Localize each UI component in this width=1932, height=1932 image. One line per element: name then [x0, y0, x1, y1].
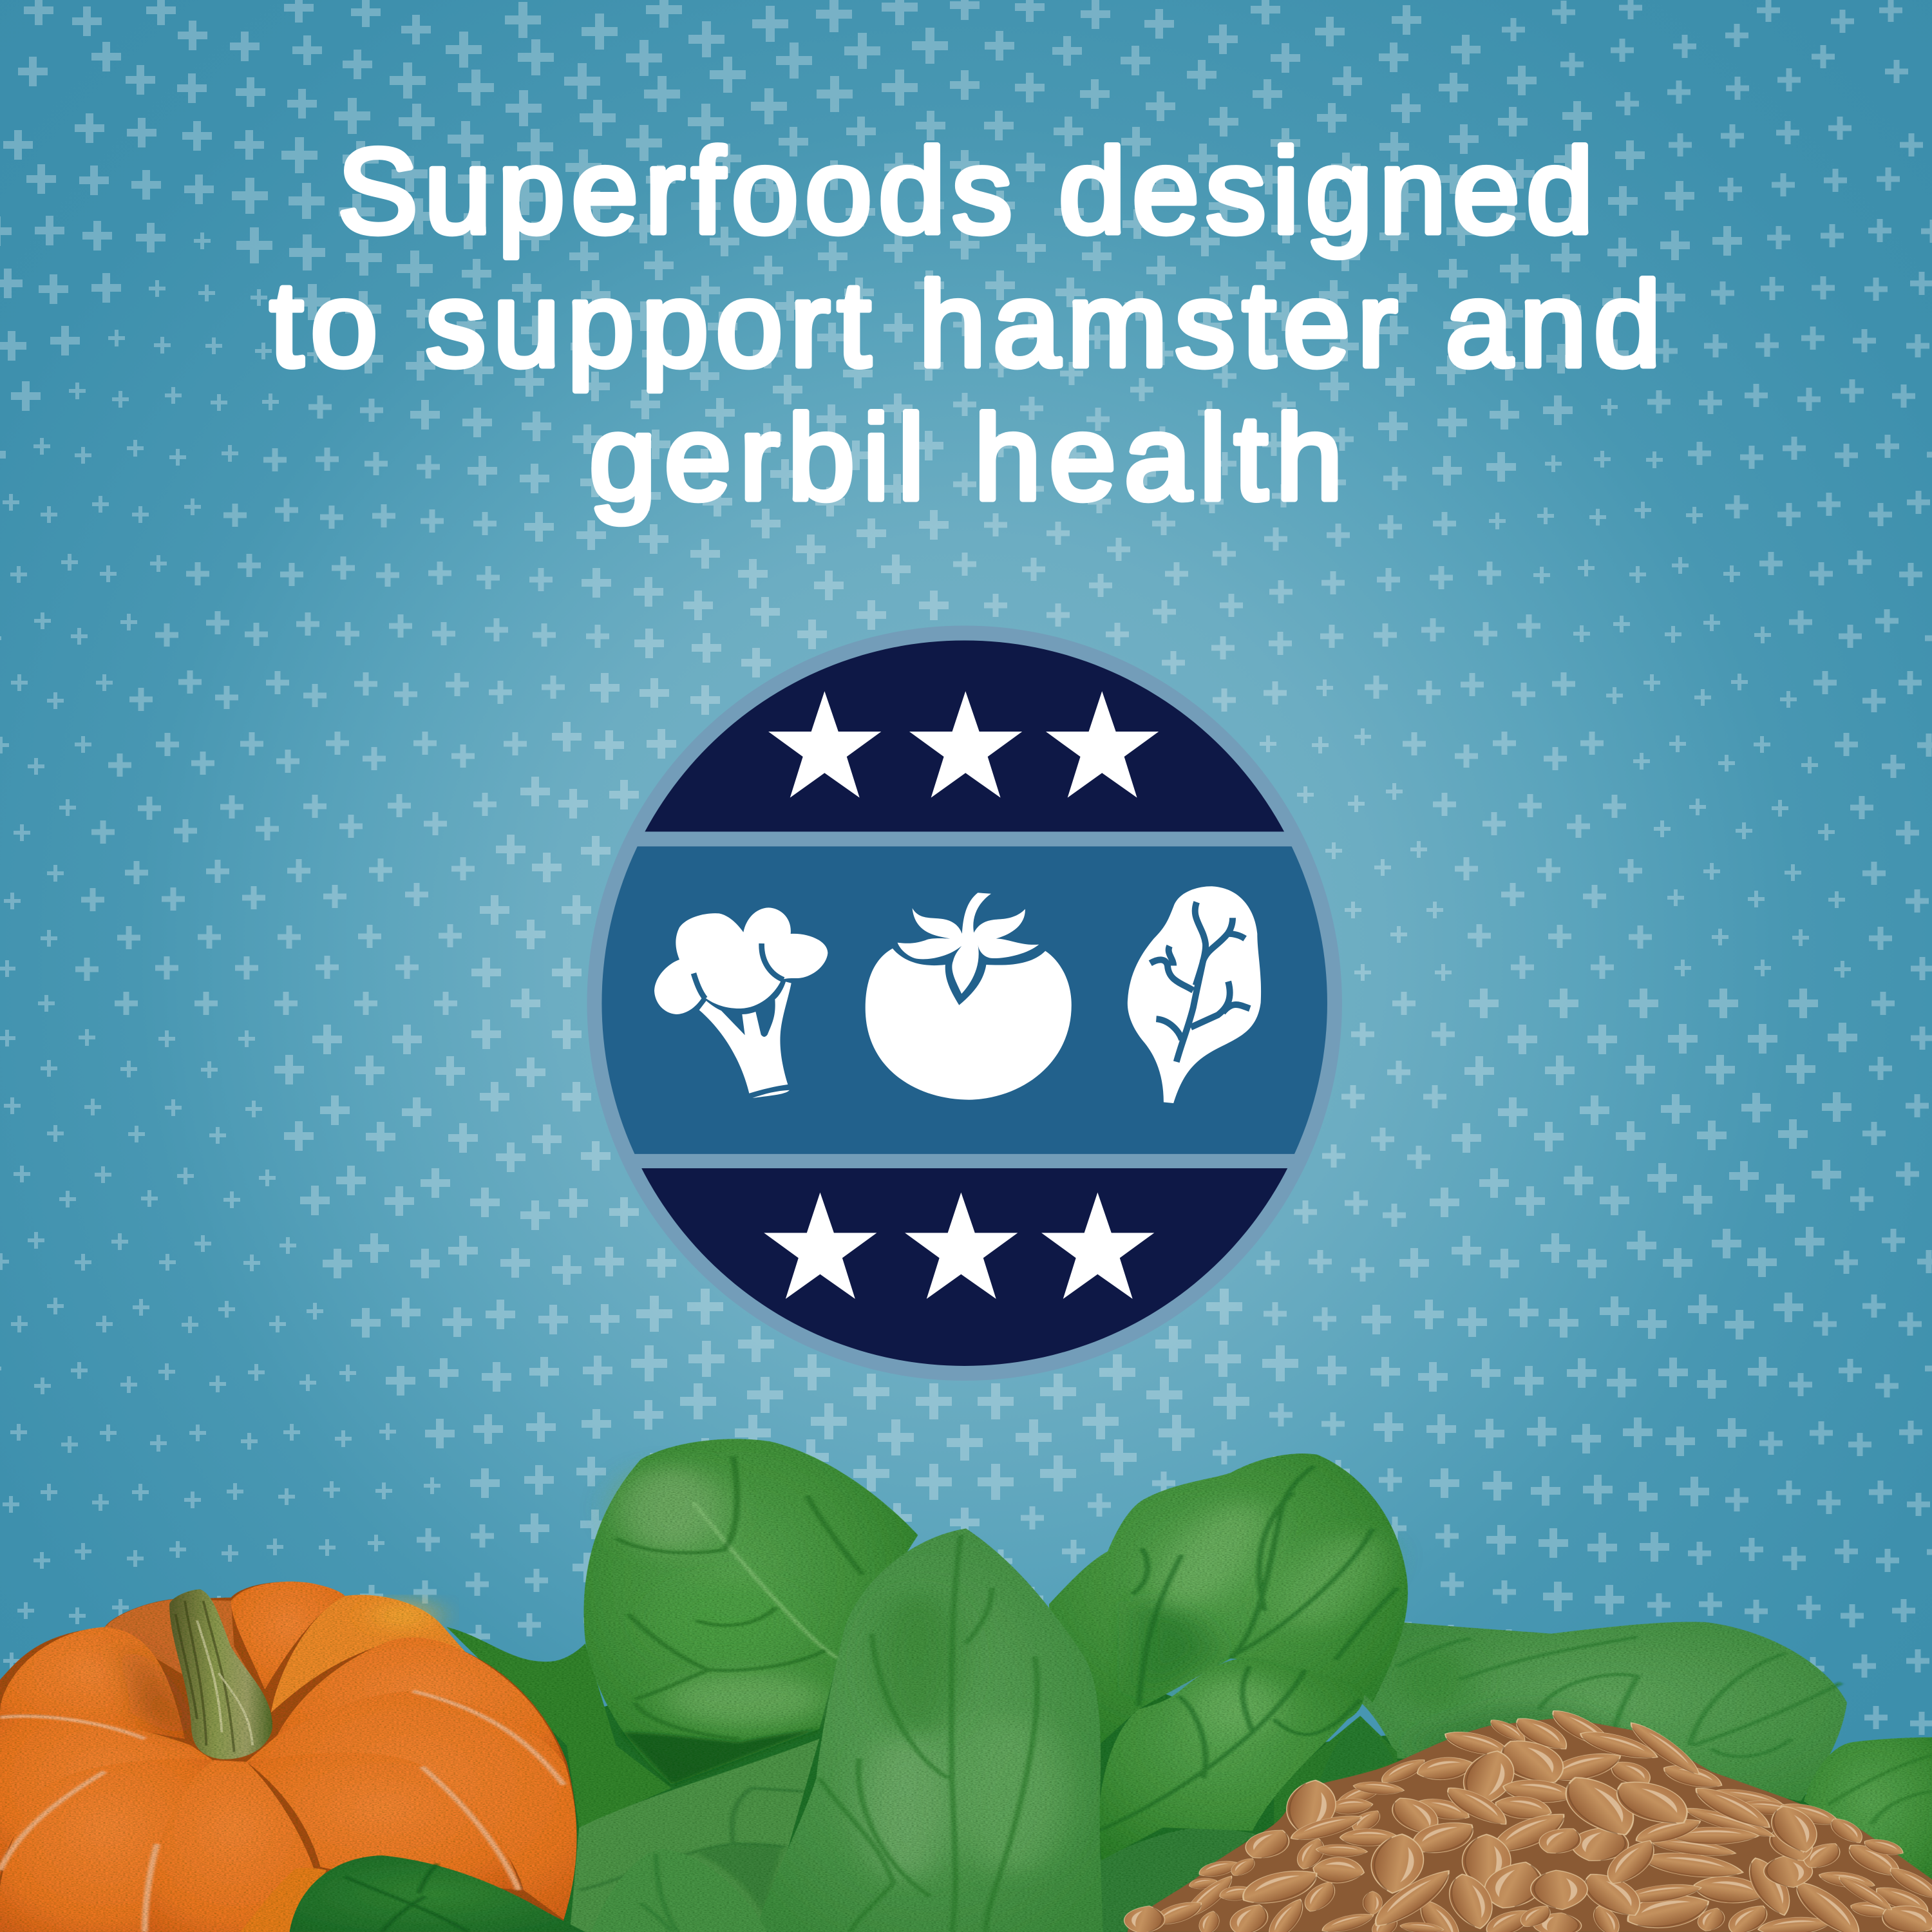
pumpkin slice [240, 1868, 327, 1932]
spinach leaf: lower middle small [591, 1849, 767, 1932]
pumpkin stem [169, 1589, 272, 1759]
green base under the leaves [431, 1614, 1932, 1932]
spinach leaf: small front [290, 1855, 585, 1932]
spinach leaf: far right [1804, 1737, 1932, 1897]
photo: spinach, pumpkin and flax seeds [0, 1439, 1932, 1932]
spinach leaf: upper left [583, 1439, 918, 1785]
icon: bottom stars [764, 1193, 1154, 1299]
spinach leaf behind pumpkin [447, 1627, 672, 1828]
icon: tomato [866, 893, 1072, 1100]
spinach leaf: front middle [1099, 1658, 1364, 1861]
pumpkin [0, 1582, 577, 1932]
icon: spinach leaf [1128, 886, 1261, 1103]
icon: broccoli [654, 907, 828, 1098]
spinach leaf: large right [1360, 1622, 1847, 1801]
title [270, 124, 1661, 525]
spinach leaf: large center [757, 1528, 1103, 1932]
spinach leaves, back row [431, 1439, 1932, 1932]
title: Superfoods designed [337, 124, 1593, 258]
flax seed pile [1120, 1706, 1932, 1932]
spinach leaf: dark lower right [1095, 1716, 1397, 1932]
title: to support hamster and [270, 257, 1661, 392]
spinach leaf: tall right [1049, 1454, 1408, 1745]
spinach leaf: lower pale [570, 1739, 819, 1932]
icon: top stars [768, 691, 1159, 798]
title: gerbil health [589, 390, 1343, 525]
badge [580, 618, 1352, 1395]
